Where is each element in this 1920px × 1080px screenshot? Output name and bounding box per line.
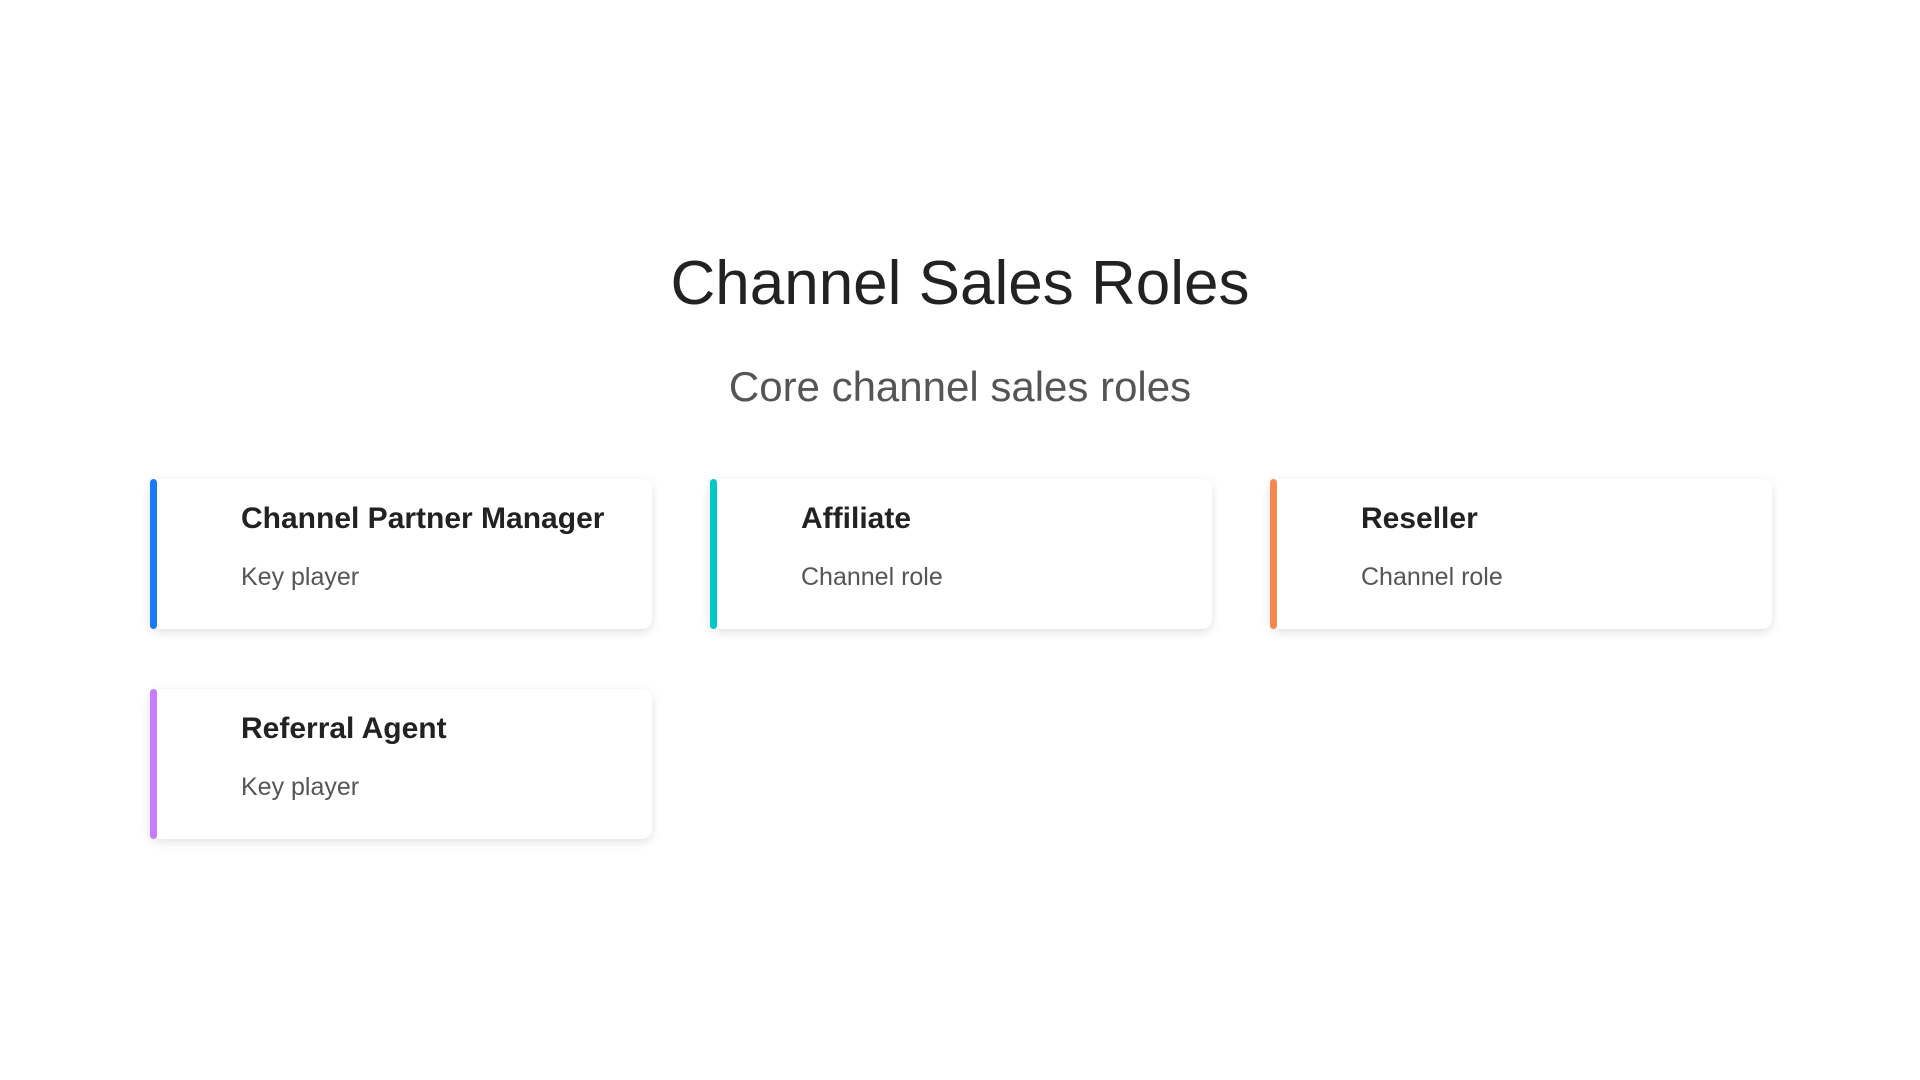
- card heading: Referral Agent: [241, 712, 447, 745]
- card: Referral Agent: [150, 689, 652, 839]
- card text: Key player: [241, 563, 359, 591]
- card text: Channel role: [1361, 563, 1503, 591]
- title: Channel Sales Roles: [670, 249, 1250, 318]
- card: Affiliate: [710, 479, 1212, 629]
- accent bar purple: [150, 689, 157, 839]
- card heading: Affiliate: [801, 502, 911, 535]
- accent bar blue: [150, 479, 157, 629]
- subtitle: Core channel sales roles: [729, 363, 1191, 410]
- card heading: Reseller: [1361, 502, 1478, 535]
- accent bar orange: [1270, 479, 1277, 629]
- card: Channel Partner Manager: [150, 479, 652, 629]
- card heading: Channel Partner Manager: [241, 502, 604, 535]
- card: Reseller: [1270, 479, 1772, 629]
- accent bar teal: [710, 479, 717, 629]
- card text: Key player: [241, 773, 359, 801]
- card text: Channel role: [801, 563, 943, 591]
